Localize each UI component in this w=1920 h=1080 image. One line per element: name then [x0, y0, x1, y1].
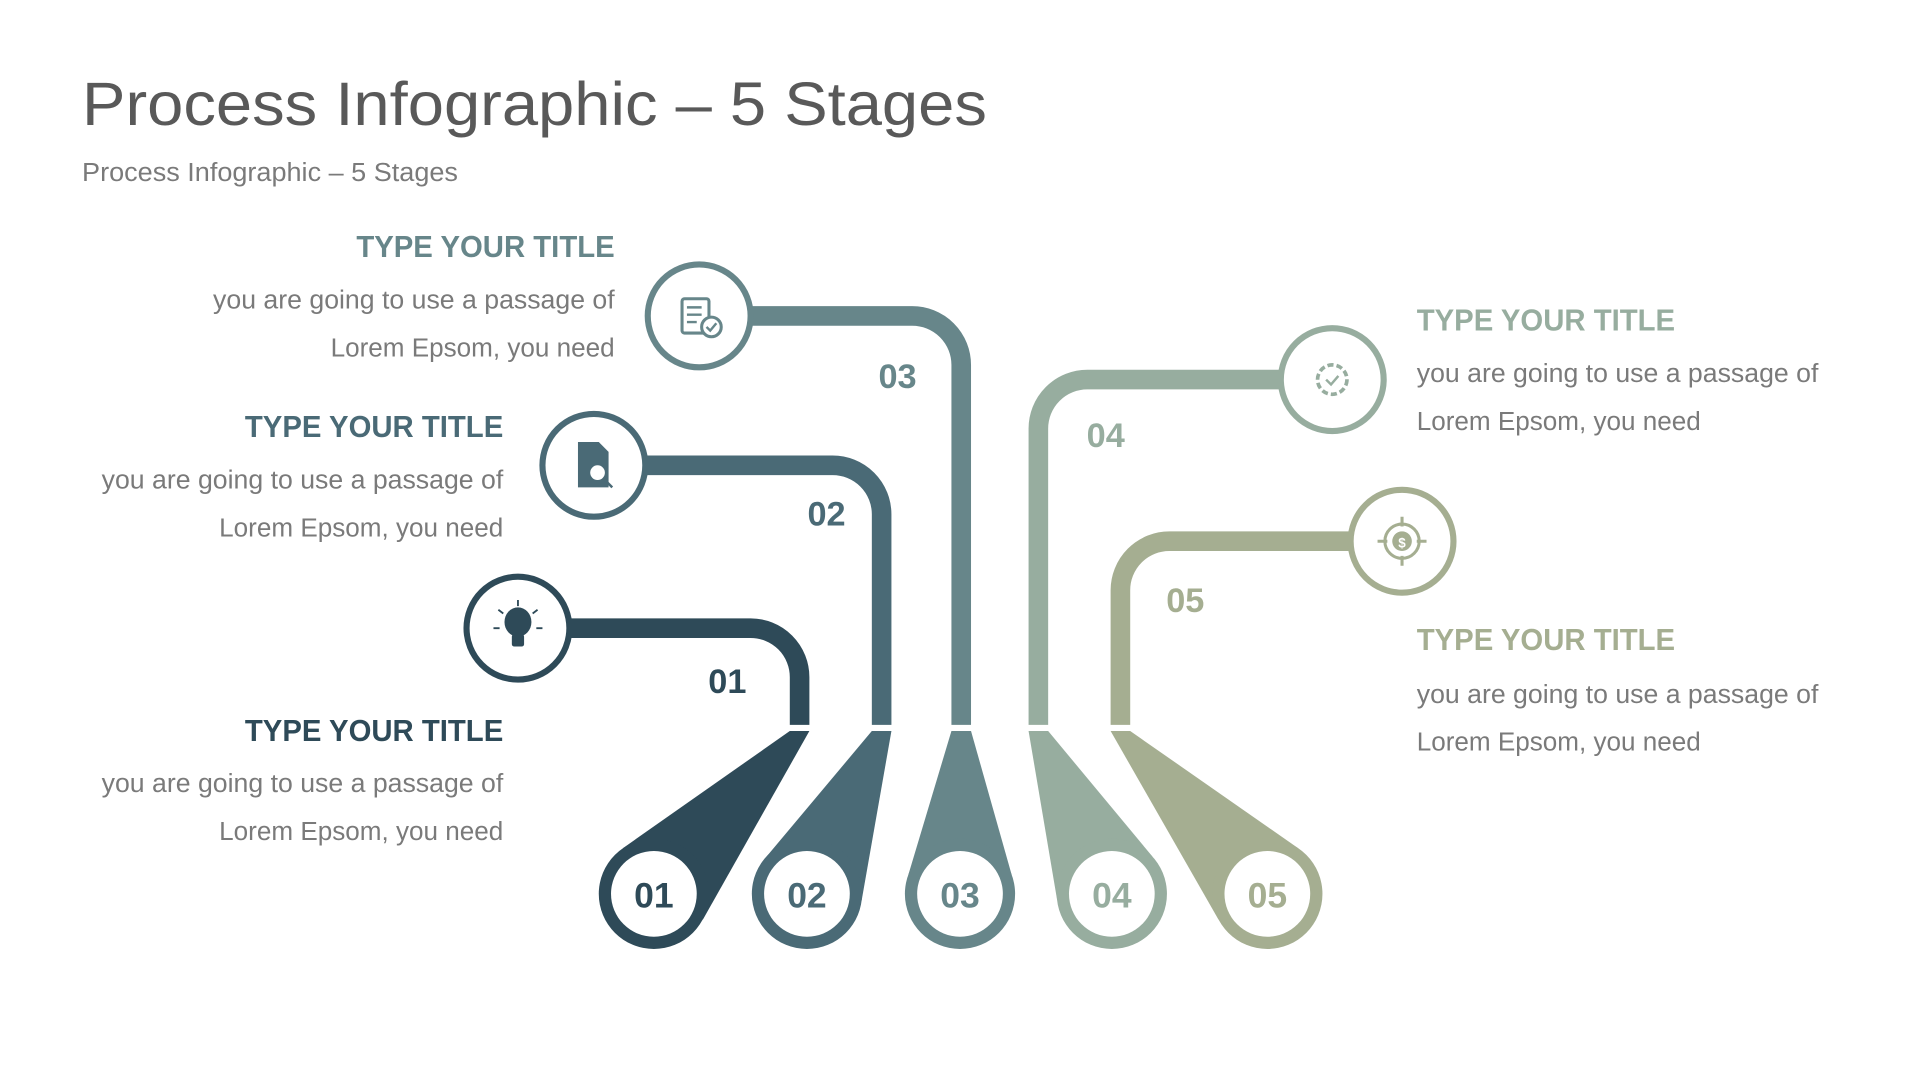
- stage 3: [648, 264, 1015, 949]
- text block 1: [102, 714, 504, 846]
- icon circle 2: [542, 414, 645, 517]
- drop 05: 05: [1248, 875, 1287, 915]
- text block 2: [102, 410, 504, 542]
- icon circle 5: $: [1398, 535, 1406, 550]
- drop 03: [905, 731, 1015, 949]
- text block 2: Lorem Epsom, you need: [219, 514, 503, 542]
- number 02: 02: [807, 495, 846, 533]
- icon circle 4: [1281, 328, 1384, 431]
- drop 03: 03: [940, 875, 980, 915]
- text block 1: Lorem Epsom, you need: [219, 818, 503, 846]
- text block 3: Lorem Epsom, you need: [331, 334, 615, 362]
- text block 1: TYPE YOUR TITLE: [245, 714, 503, 748]
- text block 1: you are going to use a passage of: [102, 770, 504, 798]
- drop 04: [1029, 731, 1167, 949]
- icon circle 5: [1351, 490, 1453, 593]
- text block 4: [1417, 304, 1819, 436]
- number 05: 05: [1166, 582, 1204, 620]
- number 03: 03: [878, 358, 917, 396]
- text block 3: [213, 230, 616, 362]
- stage 4: [1029, 328, 1384, 949]
- stage 2: [542, 414, 891, 949]
- drop 02: [752, 731, 891, 949]
- icon circle 3: [648, 264, 751, 367]
- text block 3: TYPE YOUR TITLE: [356, 230, 615, 264]
- subtitle: Process Infographic – 5 Stages: [82, 159, 458, 187]
- icon circle 1: [467, 577, 569, 680]
- stage 1: [467, 577, 809, 949]
- text block 4: Lorem Epsom, you need: [1417, 408, 1701, 436]
- number 01: 01: [708, 663, 746, 701]
- stage 5: [1111, 490, 1453, 949]
- text block 2: TYPE YOUR TITLE: [245, 410, 503, 444]
- text block 5: Lorem Epsom, you need: [1417, 729, 1701, 757]
- text block 5: you are going to use a passage of: [1417, 681, 1819, 709]
- text block 5: TYPE YOUR TITLE: [1417, 623, 1675, 657]
- text block 2: you are going to use a passage of: [102, 467, 504, 495]
- text block 4: TYPE YOUR TITLE: [1417, 304, 1675, 338]
- text block 5: [1417, 623, 1819, 757]
- drop 01: 01: [634, 875, 674, 915]
- drop 04: 04: [1092, 875, 1132, 915]
- drop 05: [1111, 731, 1322, 949]
- text block 4: you are going to use a passage of: [1417, 360, 1819, 388]
- drop 02: 02: [787, 875, 827, 915]
- drop 01: [599, 731, 809, 949]
- title: Process Infographic – 5 Stages: [82, 70, 987, 138]
- text block 3: you are going to use a passage of: [213, 287, 616, 315]
- number 04: 04: [1087, 417, 1125, 455]
